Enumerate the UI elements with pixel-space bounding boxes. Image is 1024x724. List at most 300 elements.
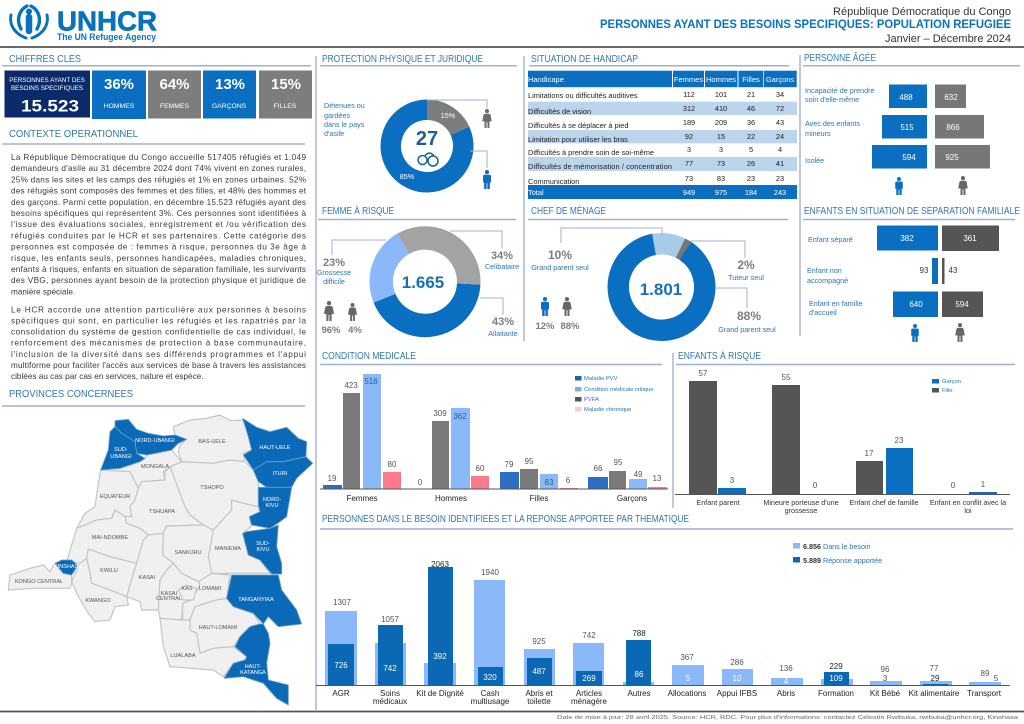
slice label: 85%: 85%: [400, 172, 415, 181]
bar chart: condition médicale: [320, 374, 668, 503]
legend: [575, 376, 654, 413]
donut chart: protection: [379, 98, 475, 194]
legend: Maladie PVV: [584, 376, 618, 382]
bar values: 55: [782, 373, 791, 382]
category labels: Cash: [481, 689, 499, 698]
label: 88% grand parent seul: [718, 309, 776, 334]
donut chart: chef de ménage: [602, 227, 721, 347]
table rows: Limitations ou difficultés auditives: [528, 91, 638, 100]
share: 88%: 88%: [560, 321, 580, 332]
table rows: 46: [747, 104, 755, 113]
table header: Handicape: [528, 75, 564, 84]
map: provinces de la RDC: [8, 415, 313, 705]
table rows: 209: [715, 118, 727, 127]
legend: 5.889 Réponse apportée: [803, 556, 882, 565]
table rows: 189: [683, 118, 695, 127]
table rows: 22: [747, 132, 755, 141]
table rows: 101: [715, 90, 727, 99]
text block: contexte opérationnel: des réfugiés sont composés des femmes et des filles, et 48% des hommes et: [11, 187, 307, 196]
kpi: hommes: [92, 70, 146, 119]
label: détenues: Détenues ou: [324, 101, 365, 110]
bar values: 640: [909, 300, 923, 309]
table rows: Difficultés à prendre soin de soi-même: [528, 148, 654, 157]
text block: contexte opérationnel: La République Démocratique du Congo accueille 517405 réfugiés et 1.049: [11, 153, 306, 162]
table rows: 41: [776, 159, 784, 168]
bar values: 1: [981, 480, 986, 489]
icon: man: [483, 170, 491, 189]
donut value: 27: [416, 128, 438, 150]
values: réponse: 86: [635, 670, 644, 679]
text block: contexte opérationnel: renforcement des mécanismes de protection à base communautaire,: [11, 339, 306, 348]
heading: provinces: PROVINCES CONCERNEES: [9, 389, 133, 400]
label: 2% tuteur seul: [728, 258, 764, 282]
values: réponse: 726: [334, 661, 348, 670]
header: UNHCR logo: [11, 6, 157, 42]
table rows: Difficultés de vision: [528, 107, 591, 116]
icon: boy: [911, 324, 919, 342]
category labels: Kit alimentaire: [909, 689, 960, 698]
table rows: 4: [778, 145, 782, 154]
table rows: 92: [685, 132, 693, 141]
connector: grand parent 10%: [561, 228, 662, 243]
category labels: toilette: [527, 697, 551, 706]
label: 2% tuteur seul: Tuteur seul: [728, 273, 764, 282]
bar values: 594: [955, 300, 969, 309]
header: period: Janvier – Décembre 2024: [885, 33, 1011, 45]
category labels: Formation: [818, 689, 854, 698]
legend: Fille: [942, 388, 953, 394]
category labels: loi: [964, 506, 972, 515]
bars: [689, 381, 997, 494]
bar values: [699, 369, 986, 490]
map: provinces de la RDC: UBANGI: [110, 454, 132, 460]
table rows: 77: [685, 159, 693, 168]
donut chart: femme à risque: [365, 222, 485, 341]
category labels: Kit de Dignité: [416, 689, 464, 698]
bar values: 632: [944, 93, 958, 102]
table header: Filles: [742, 75, 760, 84]
values: besoin: [333, 560, 990, 678]
table rows: Difficultés à se déplacer à pied: [528, 121, 629, 130]
bar values: 516: [364, 377, 378, 386]
text block: contexte opérationnel: des VBG, personnes ayant besoin de la protection physique et juridique de: [11, 276, 306, 285]
text block: contexte opérationnel: des garçons. Parmi cette population, en décembre 15.523 réfugiés ayant des: [11, 198, 306, 207]
bar values: 95: [614, 458, 623, 467]
category labels: Garçons: [617, 494, 647, 503]
bar values: 66: [594, 464, 603, 473]
table rows: 21: [747, 90, 755, 99]
map: provinces de la RDC: CENTRAL: [156, 596, 182, 602]
table rows: 24: [776, 132, 784, 141]
text block: contexte opérationnel: personnes est composée de : femmes à risque, personnes du 3e âge à: [11, 243, 306, 252]
bar chart: enfants à risque: [675, 369, 1010, 515]
icon: man 12%: [541, 297, 549, 316]
map: provinces de la RDC: KWILU: [100, 568, 118, 574]
values: besoin: 925: [532, 637, 546, 646]
panel: protection physique et juridique: [324, 98, 492, 194]
map: provinces de la RDC: LOMAMI: [199, 586, 221, 592]
category labels: grossesse: [785, 506, 817, 515]
values: besoin: 77: [930, 664, 939, 673]
text block: contexte opérationnel: 25% dans les sites et les camps des réfugiés et 1% en zones urbaines. 52%: [11, 175, 306, 184]
icon: handcuffs: [418, 153, 438, 166]
bars: dans le besoin: [325, 580, 1001, 686]
bar values: 0: [418, 478, 423, 487]
icon: woman: [482, 109, 492, 128]
category labels: ménagère: [571, 697, 608, 706]
table header: Garçons: [766, 75, 794, 84]
icon: woman: [958, 176, 968, 195]
bar values: [899, 93, 960, 162]
bar values: 93: [920, 266, 929, 275]
table rows: 73: [685, 174, 693, 183]
table rows: 23: [776, 174, 784, 183]
bars: filles: [942, 226, 999, 317]
heading: personne âgée: PERSONNE ÂGÉE: [804, 51, 876, 64]
values: besoin: 1057: [381, 615, 399, 624]
table rows: 112: [683, 90, 695, 99]
values: réponse: 5: [994, 674, 999, 683]
bar values: 925: [945, 153, 959, 162]
values: besoin: 2063: [431, 560, 449, 569]
legend: Maladie chronique: [584, 407, 631, 413]
table rows: Communication: [528, 177, 579, 186]
header: main title: PERSONNES AYANT DES BESOINS SPECIFIQUES: POPULATION REFUGIEE: [600, 19, 1011, 31]
table rows: 3: [687, 145, 691, 154]
table header: Femmes: [674, 75, 703, 84]
bar values: 23: [895, 436, 904, 445]
heading: condition médicale: CONDITION MEDICALE: [322, 351, 416, 362]
table rows: 34: [776, 90, 784, 99]
map: provinces de la RDC: MONGALA: [141, 464, 169, 470]
text block: contexte opérationnel: multiforme pour faciliter l'accès aux services de base à travers les assistances: [11, 361, 306, 370]
heading: enfants à risque: ENFANTS À RISQUE: [678, 349, 761, 362]
table rows: 73: [717, 159, 725, 168]
map: provinces de la RDC: HAUT-LOMAMI: [199, 625, 238, 631]
connector: men: [470, 151, 487, 168]
chart: enfants en situation de séparation: [807, 226, 999, 342]
row labels: accompagné: [807, 276, 848, 285]
category labels: Abris: [777, 689, 795, 698]
map: provinces de la RDC: SUD-: [114, 447, 128, 453]
table rows: 43: [776, 118, 784, 127]
category labels: Abris et: [525, 689, 553, 698]
label: grossesse difficile: 23%: [323, 257, 345, 269]
donut value: 1.801: [640, 280, 682, 299]
text block: contexte opérationnel: besoins spécifiques qui représentent 3%. Ces personnes sont identifiées à: [11, 209, 306, 218]
values: besoin: 788: [632, 629, 646, 638]
map: provinces de la RDC: LUALABA: [170, 653, 196, 659]
category labels: multiusage: [471, 697, 510, 706]
bar values: 13: [653, 474, 662, 483]
bar values: 361: [963, 234, 977, 243]
kpi: garçons: GARÇONS: [212, 103, 247, 110]
values: réponse: 320: [483, 673, 497, 682]
category labels: Femmes: [346, 494, 378, 503]
category labels: Allocations: [668, 689, 706, 698]
text block: contexte opérationnel: [11, 153, 307, 381]
bar values: 83: [545, 478, 554, 487]
map: provinces de la RDC: TANGANYIKA: [238, 597, 274, 603]
bar chart: besoin et réponse par thématique: [316, 542, 1010, 706]
row labels: Avec des enfants: [805, 119, 860, 128]
row labels: Enfant séparé: [808, 235, 853, 244]
kpi: total: PERSONNES AYANT DES: [9, 77, 85, 84]
category labels: Hommes: [435, 494, 467, 503]
values: réponse: [334, 652, 999, 686]
legend: Garçon: [942, 379, 961, 385]
values: besoin: 89: [981, 669, 990, 678]
table rows: 312: [683, 104, 695, 113]
legend: Condition médicale critique: [584, 387, 654, 393]
heading: situation de handicap: SITUATION DE HANDICAP: [531, 54, 638, 65]
table rows: 3: [719, 145, 723, 154]
row labels: [805, 86, 875, 165]
heading: chef de ménage: CHEF DE MÉNAGE: [531, 204, 606, 217]
bar values: 49: [634, 470, 643, 479]
map: provinces de la RDC: EQUATEUR: [100, 494, 130, 500]
bars: [323, 374, 667, 490]
map: provinces de la RDC: TSHOPO: [200, 485, 224, 491]
bar values: 17: [865, 449, 874, 458]
legend: 6.856 Dans le besoin: [803, 542, 871, 551]
text block: contexte opérationnel: Le HCR accorde une attention particulière aux personnes à besoins: [11, 305, 306, 314]
heading: femme à risque: FEMME À RISQUE: [322, 204, 394, 217]
bar values: 79: [505, 460, 514, 469]
category labels: [332, 689, 1002, 706]
kpi: filles: 15%: [271, 76, 301, 93]
values: réponse: 109: [829, 674, 843, 683]
label: grossesse difficile: Grossesse: [317, 268, 351, 277]
category labels: Transport: [967, 689, 1002, 698]
values: besoin: 742: [582, 631, 596, 640]
table rows: Difficultés de mémorisation / concentration: [528, 162, 672, 171]
bar values: 0: [951, 481, 956, 490]
map: provinces de la RDC: SANKURU: [174, 550, 202, 556]
bar values: 382: [900, 234, 914, 243]
bar values: 515: [900, 123, 914, 132]
category labels: [346, 494, 647, 503]
text block: contexte opérationnel: manière spéciale.: [11, 287, 75, 296]
header: country: République Démocratique du Congo: [833, 6, 1011, 18]
row labels: mineurs: [805, 129, 831, 138]
bar values: [328, 377, 662, 487]
label: célibataire: [485, 250, 519, 271]
icon: girl: [955, 323, 965, 342]
chart: personne âgée: [805, 84, 990, 195]
bar values: 866: [946, 123, 960, 132]
bars: femmes: [935, 84, 990, 168]
label: détenues: [324, 101, 365, 138]
bar values: 80: [388, 460, 397, 469]
category labels: Appui IFBS: [717, 689, 757, 698]
kpi: hommes: HOMMES: [104, 103, 135, 110]
table rows: [528, 90, 786, 197]
table rows: 184: [745, 188, 757, 197]
icon: girl 4%: [348, 303, 357, 321]
values: réponse: 5: [686, 674, 691, 683]
bar values: 6: [566, 476, 571, 485]
bar values: 57: [699, 369, 708, 378]
values: réponse: 742: [383, 664, 397, 673]
table rows: 72: [776, 104, 784, 113]
share: 12%: 12%: [535, 321, 555, 332]
bar values: 3: [730, 476, 735, 485]
bar values: 362: [453, 412, 467, 421]
map: provinces de la RDC: KINSHASA: [54, 564, 82, 570]
label: 88% grand parent seul: 88%: [737, 309, 761, 323]
connector: allaitante: [480, 298, 503, 315]
label: détenues: gardées: [324, 111, 350, 120]
panel: key figures: [4, 70, 312, 119]
panel: chef de ménage: [531, 227, 776, 347]
table rows: 949: [683, 188, 695, 197]
values: réponse: 29: [931, 674, 940, 683]
values: besoin: 1940: [481, 568, 499, 577]
values: réponse: 269: [582, 674, 596, 683]
category labels: médicaux: [373, 697, 407, 706]
category labels: AGR: [332, 689, 350, 698]
values: réponse: 487: [532, 667, 546, 676]
table rows: 410: [715, 104, 727, 113]
label: grossesse difficile: [317, 257, 351, 286]
row labels: soin d'elle-même: [805, 95, 859, 104]
text block: contexte opérationnel: consolidation du système de gestion confidentielle de cas individuel, le: [11, 328, 306, 337]
bar values: 594: [902, 153, 916, 162]
values: besoin: 229: [829, 662, 843, 671]
category labels: Enfant chef de famille: [849, 498, 919, 507]
table rows: Total: [528, 188, 544, 197]
table rows: 26: [747, 159, 755, 168]
text block: contexte opérationnel: demandeurs d'asile au 31 décembre 2024 dont 74% vivent en zones rurales,: [11, 164, 306, 173]
map: provinces de la RDC: KAS: [181, 586, 193, 592]
category labels: Mineure porteuse d'une: [763, 498, 839, 507]
label: 10% grand parent seul: 10%: [548, 248, 572, 262]
heading: chiffres clés: CHIFFRES CLES: [9, 54, 81, 65]
table rows: 23: [747, 174, 755, 183]
connector: grand parent 88%: [715, 288, 747, 308]
values: besoin: 1307: [333, 598, 351, 607]
footer: source note: Date de mise à jour: 28 avril 2025. Source: HCR, RDC. Pour plus d'informations: contactez Célestin Rwibuka, rwibuka@unhcr.org, Kinshasa: [557, 715, 1019, 721]
label: 2% tuteur seul: 2%: [737, 258, 755, 272]
bars: garçons: [877, 226, 938, 317]
map: provinces de la RDC: KONGO CENTRAL: [15, 579, 63, 585]
table rows: 36: [747, 118, 755, 127]
map: provinces de la RDC: KIVU: [256, 547, 270, 553]
label: 10% grand parent seul: [531, 248, 589, 272]
text block: contexte opérationnel: spécifiques qui sont, en particulier les réfugiés et les rapatriés par la: [11, 316, 306, 325]
values: réponse: 4: [784, 677, 789, 686]
heading: contexte: CONTEXTE OPERATIONNEL: [9, 129, 138, 140]
map: provinces de la RDC: MANIEMA: [215, 546, 241, 552]
text block: contexte opérationnel: enfants à risques, enfants en situation de séparation familiale, les survivants: [11, 265, 306, 274]
legend: [932, 379, 961, 394]
table header: Hommes: [706, 75, 736, 84]
category labels: Autres: [627, 689, 651, 698]
values: besoin: 96: [881, 665, 890, 674]
kpi: hommes: 36%: [104, 76, 134, 93]
donut value: 1.665: [402, 273, 444, 292]
connector: women: [427, 100, 487, 108]
category labels: Soins: [380, 689, 400, 698]
kpi: femmes: FEMMES: [160, 103, 190, 110]
text block: contexte opérationnel: réfugiés conduites par le HCR et ses partenaires. Cette catégorie des: [11, 231, 306, 240]
category labels: Enfant parent: [696, 498, 740, 507]
table rows: 975: [715, 188, 727, 197]
bar values: 19: [328, 474, 337, 483]
label: détenues: d'asile: [324, 129, 344, 138]
table rows: 83: [717, 174, 725, 183]
label: 10% grand parent seul: Grand parent seul: [531, 263, 589, 272]
category labels: Filles: [530, 494, 548, 503]
label: célibataire: 34%: [491, 250, 513, 262]
map: provinces de la RDC: ITURI: [273, 471, 288, 477]
kpi: total: BESOINS SPECIFIQUES: [11, 85, 83, 92]
table: situation de handicap: [528, 71, 797, 199]
row labels: Enfant non: [807, 266, 842, 275]
panel: femme à risque: [317, 222, 519, 341]
text block: contexte opérationnel: l'inclusion de la diversité dans ses différends programmes et l'appui: [11, 350, 306, 359]
values: réponse: 392: [433, 652, 447, 661]
kpi: garçons: 13%: [215, 76, 245, 93]
text block: contexte opérationnel: l'issue des évaluations sociales, enregistrement et /ou vérification des: [11, 220, 306, 229]
bar values: 43: [949, 266, 958, 275]
kpi: total: [4, 70, 90, 118]
table rows: 243: [774, 188, 786, 197]
bar values: 423: [344, 381, 358, 390]
values: réponse: 3: [883, 674, 888, 683]
label: détenues: dans le pays: [324, 120, 365, 129]
icon: man: [895, 177, 903, 195]
connector: tuteur: [690, 241, 745, 258]
icon: woman 88%: [562, 297, 572, 316]
row labels: d'accueil: [809, 308, 837, 317]
row labels: Incapacité de prendre: [805, 86, 875, 95]
table rows: 15: [717, 132, 725, 141]
kpi: filles: FILLES: [274, 103, 297, 110]
legend: [793, 542, 882, 565]
values: besoin: 286: [730, 658, 744, 667]
values: besoin: 136: [779, 664, 793, 673]
map: provinces de la RDC: NORD-: [263, 497, 281, 503]
values: réponse: 10: [733, 674, 742, 683]
bar values: 60: [476, 464, 485, 473]
connector: grossesse: [332, 240, 386, 255]
table header: [528, 71, 797, 87]
table rows: 5: [749, 145, 753, 154]
map: provinces de la RDC: HAUT-: [245, 664, 262, 670]
map: provinces de la RDC: HAUT-UELE: [259, 445, 291, 451]
bar values: 95: [525, 457, 534, 466]
kpi: femmes: 64%: [159, 76, 190, 93]
kpi: femmes: [148, 70, 201, 118]
row labels: Isolée: [805, 156, 824, 165]
row labels: Enfant en famille: [809, 299, 863, 308]
legend: PVFA: [584, 397, 599, 403]
bars: réponse apportée: [328, 567, 948, 686]
values: besoin: 367: [680, 653, 694, 662]
map: provinces de la RDC: KASAI: [139, 575, 156, 581]
row labels: [807, 235, 863, 317]
category labels: [696, 498, 1006, 515]
logo wordmark: UNHCR: [57, 6, 157, 36]
heading: personnes dans le besoin: PERSONNES DANS LE BESOIN IDENTIFIEES ET LA REPONSE APPORTEE PAR THEMATIQUE: [322, 514, 689, 525]
text block: contexte opérationnel: ciblées au cas par cas en services, nature et espèce.: [11, 372, 204, 381]
map: provinces de la RDC: KIVU: [265, 503, 279, 509]
label: allaitante: 43%: [492, 316, 514, 328]
map: provinces de la RDC: NORD-UBANGI: [135, 438, 175, 444]
map: provinces de la RDC: KWANGO: [85, 598, 111, 604]
